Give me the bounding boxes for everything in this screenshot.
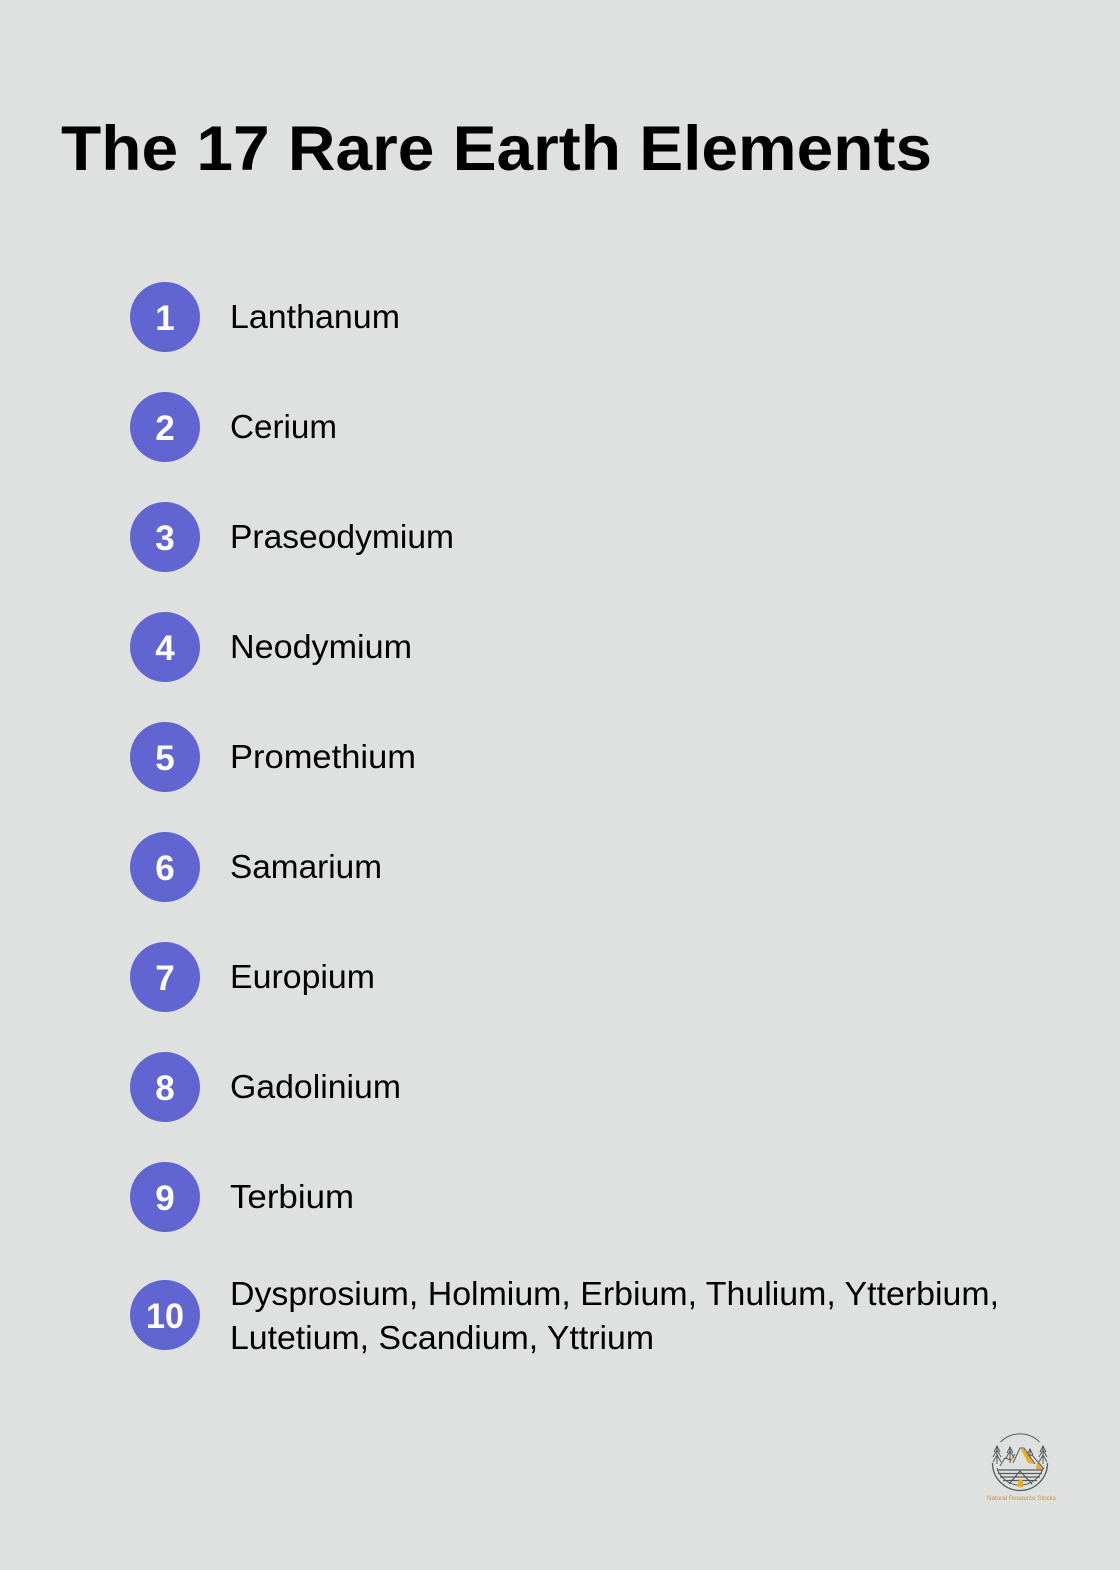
item 8: Gadolinium: 8 [155,1069,175,1108]
item 5: Promethium [130,722,416,792]
item 4: Neodymium: Neodymium [230,628,412,665]
item 5: Promethium: 5 [155,739,175,778]
item 9: Terbium: 9 [155,1179,175,1218]
item 5: Promethium: Promethium [230,738,416,775]
item 10: remaining elements: Dysprosium, Holmium, Erbium, Thulium, Ytterbium, [230,1275,999,1312]
item 6: Samarium: 6 [155,849,175,888]
item 1: Lanthanum: Lanthanum [230,298,400,335]
logo: Natural Resource Stocks [987,1434,1057,1502]
item 3: Praseodymium [130,502,454,572]
item 10: remaining elements: 10 [146,1297,184,1336]
item 6: Samarium [130,832,382,902]
item 10: remaining elements [130,1275,999,1356]
item 2: Cerium: 2 [155,409,175,448]
item 1: Lanthanum: 1 [155,299,175,338]
item 8: Gadolinium [130,1052,401,1122]
item 2: Cerium [130,392,337,462]
item 4: Neodymium [130,612,412,682]
icon: mountain badge [992,1434,1048,1490]
item 9: Terbium: Terbium [230,1178,354,1215]
item 10: remaining elements: Lutetium, Scandium, Yttrium [230,1319,654,1356]
item 7: Europium: 7 [155,959,175,998]
item 7: Europium: Europium [230,958,375,995]
item 8: Gadolinium: Gadolinium [230,1068,401,1105]
item 7: Europium [130,942,375,1012]
title: The 17 Rare Earth Elements [61,114,932,184]
item 6: Samarium: Samarium [230,848,382,885]
item 3: Praseodymium: Praseodymium [230,518,454,555]
item 9: Terbium [130,1162,354,1232]
item 3: Praseodymium: 3 [155,519,175,558]
item 2: Cerium: Cerium [230,408,337,445]
logo caption: Natural Resource Stocks [987,1495,1057,1502]
item 4: Neodymium: 4 [155,629,175,668]
list of elements [130,282,999,1356]
item 1: Lanthanum [130,282,400,352]
